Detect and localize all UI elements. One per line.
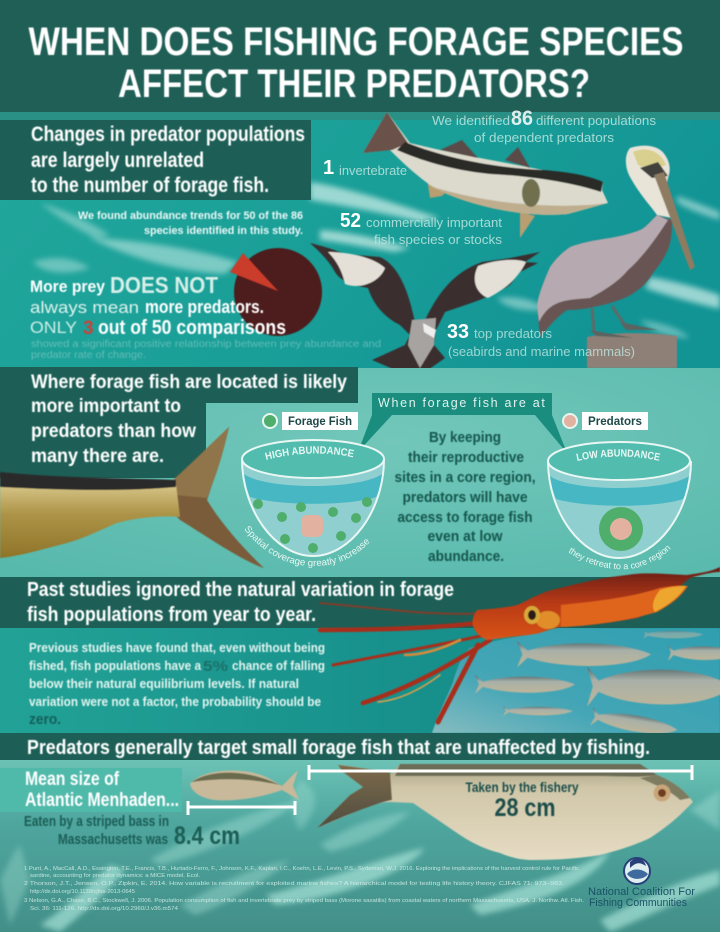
text: previous studies: variation were not a factor, the probability should be: [29, 694, 321, 709]
header banner: [0, 0, 720, 112]
text: reproductive sites: predators will have: [402, 489, 528, 506]
references: [24, 866, 584, 912]
text: previous studies: below their natural equilibrium levels. If natural: [29, 676, 299, 691]
stat: 1 invertebrate: [323, 157, 407, 179]
stat: 52 commercially important: fish species or stocks: [374, 232, 503, 247]
text: 86 populations: of dependent predators: [474, 130, 615, 145]
text: 86 populations: different populations: [536, 113, 657, 128]
logo: national coalition for fishing communities: National Coalition For: [588, 886, 695, 898]
text: more prey does not mean more predators: showed a significant positive relationship between prey abundance and: [31, 339, 381, 350]
text: previous studies: zero.: [29, 711, 61, 728]
text: more prey does not mean more predators: 3: [83, 318, 94, 339]
panel: where forage fish are located: [0, 367, 720, 577]
references: http://dx.doi.org/10.1139/cjfas-2013-0645: [30, 889, 135, 895]
title: [28, 20, 684, 106]
text: reproductive sites: their reproductive: [408, 449, 524, 466]
text: eaten by striped bass: [24, 813, 240, 850]
text box: mean size: Mean size of: [25, 769, 120, 790]
text: previous studies: 5%: [203, 658, 228, 675]
callout: when forage fish are at: When forage fish are at: [378, 396, 546, 410]
text: reproductive sites: sites in a core region,: [394, 469, 536, 486]
text: more prey does not mean more predators: [30, 272, 381, 361]
heading box: location matters: more important to: [31, 395, 181, 417]
icon: squid: [320, 567, 720, 722]
diagram: low abundance bowl: LOW ABUNDANCE: [576, 449, 660, 461]
icon: large menhaden: [317, 764, 693, 860]
legend: predators: [563, 412, 648, 430]
stat: 52 commercially important: [340, 210, 503, 247]
text: abundance trends: We found abundance trends for 50 of the 86: [78, 210, 303, 222]
logo: national coalition for fishing communities: Fishing Communities: [589, 897, 687, 909]
stat: 52 commercially important: commercially important: [366, 215, 502, 230]
text: more prey does not mean more predators: ONLY: [30, 318, 77, 337]
background: forage fish water: [432, 628, 720, 733]
icon: forage fish tail: [0, 427, 264, 568]
icon: small menhaden: [190, 770, 299, 800]
panel: predators target small forage fish: [0, 733, 720, 932]
text: previous studies: [29, 640, 325, 728]
legend: forage fish: [263, 412, 358, 430]
icon: osprey: [310, 243, 540, 372]
label: taken by the fishery: 28 cm: [494, 794, 556, 822]
text: previous studies: fished, fish populations have a: [29, 658, 202, 673]
label: taken by the fishery: [466, 780, 579, 822]
pie chart: 3 of 50 comparisons: [230, 248, 322, 336]
references: 2 Thorson, J.T., Jensen, O.P., Zipkin, E. 2014. How variable is recruitment for exploited marine fishes? A hierarchical model for testing life history theory. CJFAS 71: 973–983.: [24, 881, 565, 887]
legend: predators: Predators: [588, 414, 642, 428]
text: 86 populations: 86: [511, 107, 533, 130]
text: more prey does not mean more predators: more predators.: [145, 297, 264, 317]
panel: natural variation: [0, 567, 720, 739]
diagram: low abundance bowl: they retreat to a core region: [568, 546, 671, 570]
icon: striped bass: [363, 112, 608, 238]
diagram: high abundance bowl: HIGH ABUNDANCE: [265, 446, 354, 460]
text: more prey does not mean more predators: predator rate of change.: [31, 350, 146, 361]
text: more prey does not mean more predators: More prey: [30, 277, 106, 296]
references: 1 Punt, A., MacCall, A.D., Essington, T.E., Francis, T.B., Hurtado-Ferro, F., Johnson, K.F., Kaplan, I.C., Koehn, L.E., Levin, P.S., Sydeman, W.J. 2016. Exploring the implications of the harvest control rule for Pacific: [24, 866, 579, 872]
text: more prey does not mean more predators: DOES NOT: [110, 272, 218, 298]
legend: forage fish: Forage Fish: [288, 414, 352, 428]
text: reproductive sites: abundance.: [428, 548, 504, 565]
diagram: low abundance bowl: [547, 441, 692, 570]
text: more prey does not mean more predators: always mean: [30, 298, 139, 317]
text: 86 populations: [432, 107, 657, 145]
label: taken by the fishery: Taken by the fishery: [466, 780, 579, 795]
text: previous studies: Previous studies have found that, even without being: [29, 640, 325, 655]
text: eaten by striped bass: Eaten by a striped bass in: [24, 813, 169, 830]
text: previous studies: chance of falling: [232, 658, 325, 673]
stat: 33 top predators: [447, 321, 635, 359]
text box: mean size: Atlantic Menhaden...: [25, 790, 179, 811]
text: reproductive sites: access to forage fish: [398, 509, 532, 526]
icon: pelican: [537, 146, 695, 368]
diagram: high abundance bowl: [241, 439, 385, 568]
heading box: past studies: Past studies ignored the natural variation in forage: [27, 579, 454, 601]
text: abundance trends: [78, 210, 303, 237]
panel: predator populations and forage abundance: [0, 107, 720, 372]
heading box: past studies: [0, 577, 720, 628]
text box: mean size: [0, 768, 182, 812]
heading box: changes in predator populations: to the number of forage fish.: [31, 174, 269, 197]
text: reproductive sites: By keeping: [429, 429, 501, 446]
text: 86 populations: We identified: [432, 113, 510, 128]
text: abundance trends: species identified in this study.: [144, 225, 303, 237]
references: sardine, accounting for predator dynamics: a MICE model. Ecol.: [30, 873, 200, 879]
scale bar: small menhaden: [188, 801, 295, 815]
stat: 1 invertebrate: invertebrate: [339, 163, 407, 178]
heading box: changes in predator populations: [0, 120, 311, 200]
references: Sci. 36: 111-126. http://dx.doi.org/10.2960/J.v36.m574: [30, 906, 178, 912]
heading box: location matters: [0, 367, 358, 478]
diagram: high abundance bowl: Spatial coverage greatly increases: [245, 526, 370, 568]
stat: 33 top predators: (seabirds and marine mammals): [448, 344, 635, 359]
heading box: predators generally target: Predators generally target small forage fish that are unaffected by fishing.: [27, 737, 650, 759]
text: reproductive sites: [394, 429, 536, 565]
stat: 1 invertebrate: 1: [323, 157, 334, 179]
heading box: location matters: many there are.: [31, 445, 164, 467]
scale bar: large menhaden: [309, 765, 692, 780]
stat: 33 top predators: top predators: [474, 326, 553, 341]
callout: when forage fish are at: [358, 393, 567, 453]
stat: 33 top predators: 33: [447, 321, 469, 343]
references: 3 Nelson, G.A., Chase, B.C., Stockwell, J. 2006. Population consumption of fish and invertebrate prey by striped bass (Morone saxatilis) from coastal waters of northern Massachusetts, USA. J. Northw. Atl. Fish.: [24, 898, 584, 904]
heading box: changes in predator populations: Changes in predator populations: [31, 123, 305, 146]
logo: national coalition for fishing communities: [588, 858, 695, 909]
title: AFFECT THEIR PREDATORS?: [118, 62, 590, 106]
text: reproductive sites: even at low: [428, 528, 503, 545]
heading box: location matters: predators than how: [31, 420, 197, 442]
icon: school of forage fish: [475, 630, 720, 739]
text: eaten by striped bass: Massachusetts was: [58, 831, 168, 848]
heading box: past studies: fish populations from year to year.: [27, 604, 316, 626]
text: more prey does not mean more predators: out of 50 comparisons: [98, 317, 286, 339]
text: eaten by striped bass: 8.4 cm: [174, 822, 240, 850]
heading box: changes in predator populations: are largely unrelated: [31, 149, 204, 172]
stat: 52 commercially important: 52: [340, 210, 361, 232]
heading box: location matters: Where forage fish are located is likely: [31, 371, 347, 393]
